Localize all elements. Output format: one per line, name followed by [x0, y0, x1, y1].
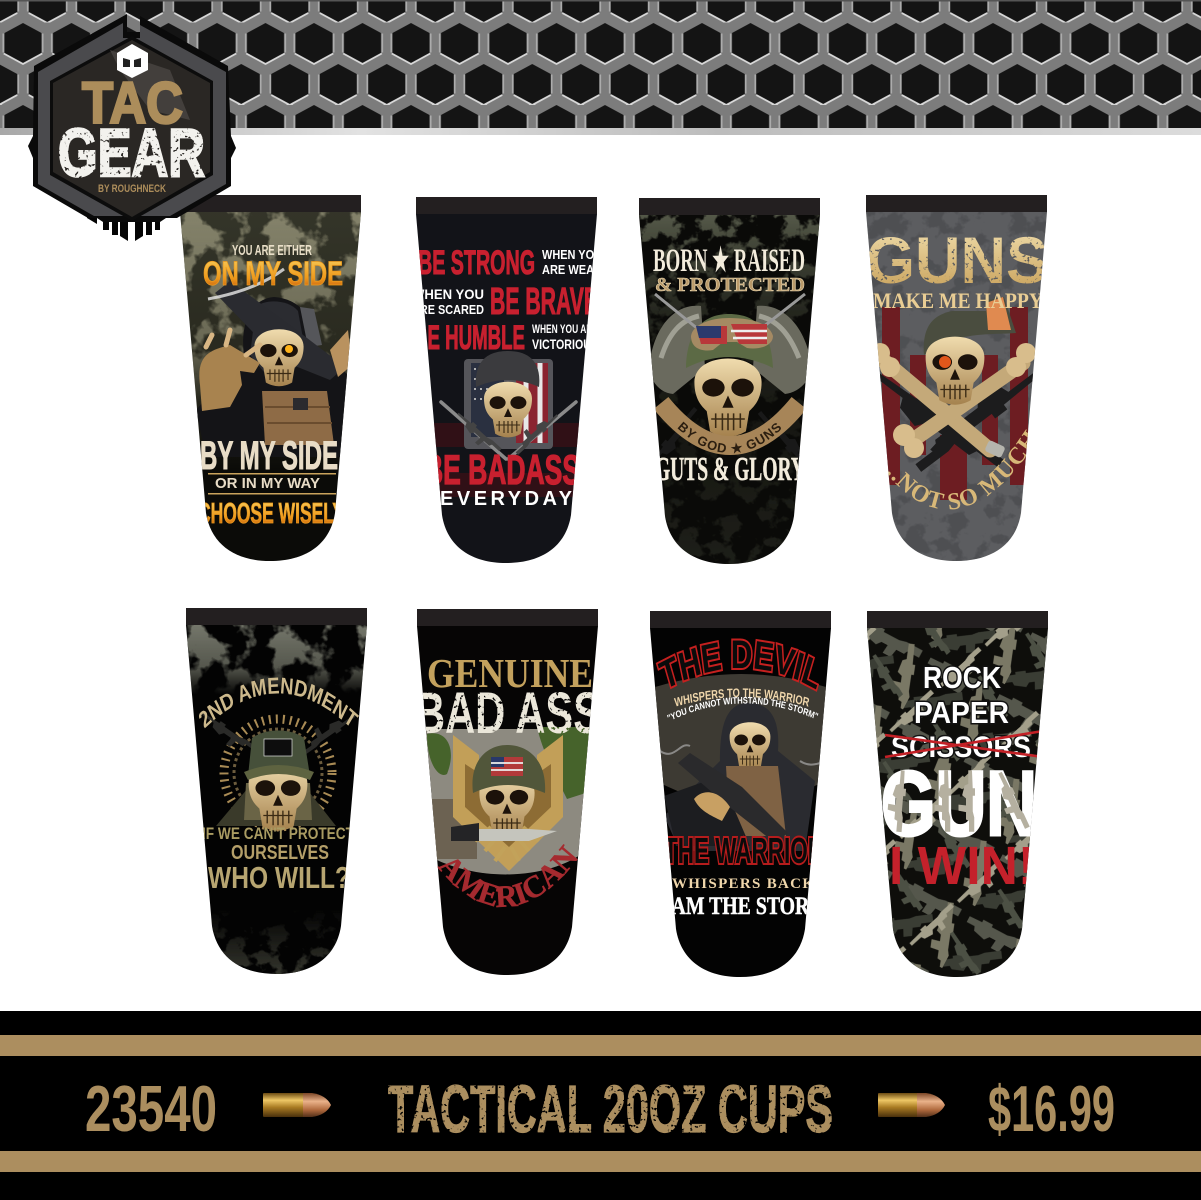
text: 2nd amendment: 2ND AMENDMENT — [199, 678, 359, 728]
text: bad ass: BAD ASS — [415, 681, 601, 746]
chevron skull emblem — [451, 735, 563, 871]
cup 6: genuine bad ass american — [417, 609, 598, 975]
text: by god guns: BY GOD ★ GUNS — [678, 422, 781, 454]
text: scissors with red cross: SCISSORS — [891, 731, 1031, 764]
text: tac: TAC — [82, 71, 183, 136]
text: be strong: BE STRONG — [418, 244, 535, 282]
text: on my side: ON MY SIDE — [203, 255, 343, 293]
cup 2: be strong: VICTORIOUS — [532, 336, 598, 352]
text: i win: I WIN! — [889, 836, 1035, 896]
reaper figure — [196, 269, 352, 457]
footer text: price: $16.99 — [988, 1072, 1115, 1145]
text: whispers back: WHISPERS BACK — [672, 876, 814, 892]
text: when you are victorious: WHEN YOU ARE — [532, 322, 598, 336]
text: guts and glory: GUTS & GLORY — [655, 451, 805, 488]
text: born raised: BORN ★ RAISED — [653, 243, 805, 279]
icon: bullet left — [263, 1093, 331, 1117]
text: make me happy: MAKE ME HAPPY — [873, 288, 1043, 313]
text: i am the storm: I AM THE STORM — [660, 893, 828, 920]
icon: skull emblem — [117, 44, 148, 78]
text: rock: ROCK — [923, 660, 1002, 695]
footer band — [0, 1011, 1201, 1200]
footer text: product name: TACTICAL 20OZ CUPS — [388, 1072, 833, 1147]
cup 1: on my side — [180, 195, 361, 561]
cup 2: be strong: ARE WEAK — [542, 262, 603, 277]
text: when you are weak: WHEN YOU — [542, 247, 602, 262]
cup 4: guns make me happy — [866, 195, 1047, 561]
cup 3: born raised protected — [639, 198, 820, 564]
text: be humble: BE HUMBLE — [414, 319, 525, 357]
text: or in my way: OR IN MY WAY — [215, 475, 320, 492]
cup 5: 2nd amendment — [186, 608, 367, 974]
text: by my side: BY MY SIDE — [200, 434, 338, 478]
text: the devil: THE DEVIL — [656, 638, 820, 692]
text: the warrior: THE WARRIOR — [664, 830, 824, 871]
text: if we cant protect: IF WE CAN'T PROTECT — [202, 824, 354, 843]
text: by roughneck: BY ROUGHNECK — [98, 183, 166, 195]
crossed bones, rifles and skull — [877, 297, 1036, 472]
text: gear: GEAR — [58, 115, 205, 191]
text: be brave: BE BRAVE — [490, 281, 598, 323]
text: ourselves: OURSELVES — [231, 842, 329, 864]
cup 8: rock paper scissors gun — [867, 611, 1048, 977]
text: not so much: ...NOT SO MUCH — [888, 429, 1028, 510]
text: be badass: BE BADASS — [424, 446, 580, 493]
text: protected: & PROTECTED — [655, 274, 805, 296]
cup 2: be strong: ARE SCARED — [412, 302, 484, 317]
header: metal honeycomb band — [0, 0, 1201, 135]
text: genuine: GENUINE — [427, 650, 593, 696]
text: gun: GUN — [881, 753, 1037, 855]
shield with skull — [441, 351, 576, 459]
bullet ring skull emblem — [202, 714, 356, 832]
text: whispers to the warrior: WHISPERS TO THE WARRIOR — [674, 688, 810, 707]
cup 7: the devil whispers — [650, 611, 831, 977]
reaper with rifle — [660, 703, 828, 851]
text: paper: PAPER — [914, 695, 1009, 730]
text: choose wisely: CHOOSE WISELY — [198, 498, 344, 530]
badge bottom stripes — [87, 198, 177, 241]
text: you are either: YOU ARE EITHER — [232, 242, 312, 259]
cup 2: be strong — [412, 197, 603, 563]
text: american: AMERICAN — [438, 844, 578, 908]
text: everyday: EVERYDAY — [440, 488, 573, 510]
text: guns: GUNS — [866, 223, 1048, 297]
text: who will: WHO WILL? — [208, 860, 350, 895]
footer text: item number: 23540 — [85, 1072, 217, 1145]
icon: bullet right — [878, 1093, 945, 1117]
text: you cannot withstand the storm: "YOU CANNOT WITHSTAND THE STORM" — [667, 696, 818, 720]
logo: tac gear badge — [28, 14, 236, 241]
winged skull emblem — [651, 293, 808, 460]
text: when you are scared: WHEN YOU — [412, 286, 484, 302]
